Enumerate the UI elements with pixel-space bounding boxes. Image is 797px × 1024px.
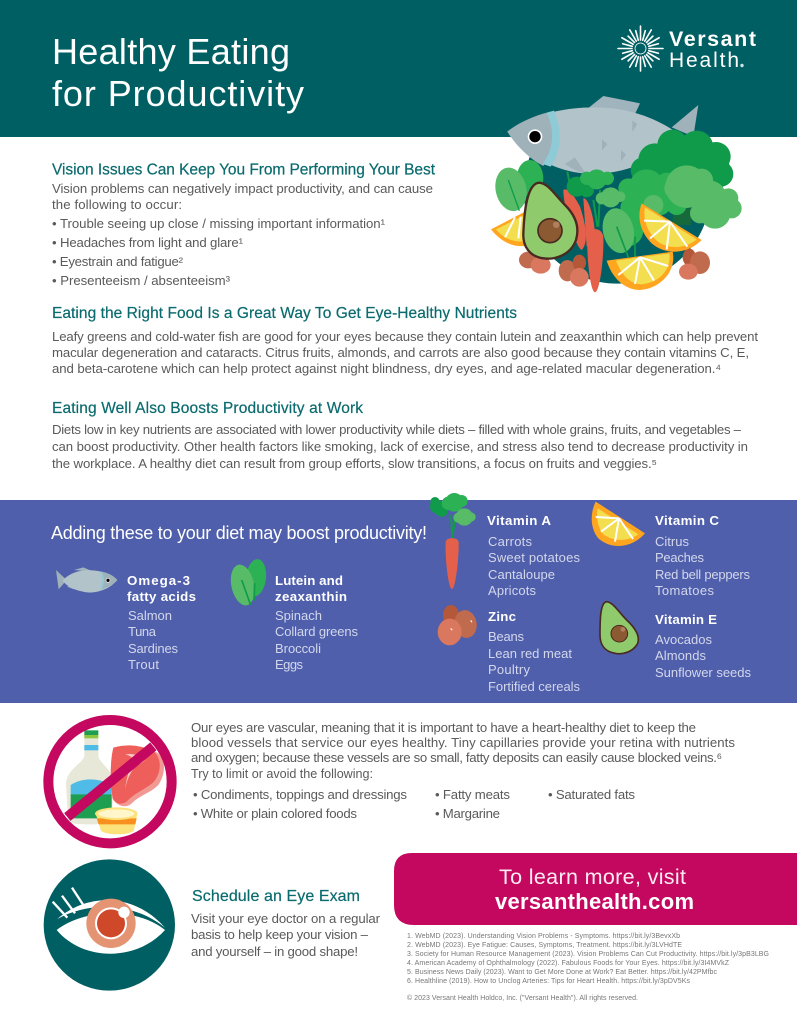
list: omega-3 foods: Sardines bbox=[128, 641, 178, 656]
section: vision issues bbox=[52, 162, 436, 288]
list: foods to limit: • Saturated fats bbox=[548, 787, 635, 802]
spinach leaves left bbox=[491, 160, 543, 214]
omega-3 group bbox=[56, 567, 196, 672]
fish bbox=[507, 96, 698, 174]
list: vitamin E foods: Sunflower seeds bbox=[655, 665, 752, 680]
text: right food body: Leafy greens and cold-water fish are good for your eyes because they contain lutein and zeaxanthin which can help prevent bbox=[52, 329, 758, 344]
text: eye exam body: Visit your eye doctor on a regular bbox=[191, 911, 381, 926]
heading: productivity at work: Eating Well Also Boosts Productivity at Work bbox=[52, 400, 363, 417]
zinc group bbox=[438, 605, 580, 694]
list: lutein foods: Eggs bbox=[275, 657, 304, 672]
list: lutein foods: Collard greens bbox=[275, 624, 358, 639]
icon: eye bbox=[44, 859, 175, 991]
list: vision symptoms: • Eyestrain and fatigue² bbox=[52, 254, 184, 269]
list: zinc foods: Lean red meat bbox=[488, 646, 572, 661]
references bbox=[407, 933, 769, 985]
text: vision intro: Vision problems can negatively impact productivity, and can cause bbox=[52, 181, 433, 196]
steak bbox=[111, 745, 164, 806]
list: vitamin C foods: Peaches bbox=[655, 550, 704, 565]
heading: eye exam: Schedule an Eye Exam bbox=[192, 888, 360, 905]
list: lutein foods: Spinach bbox=[275, 608, 322, 623]
right citrus wedge bbox=[639, 203, 702, 252]
section: productivity at work bbox=[52, 400, 748, 471]
list: vitamin C foods: Red bell peppers bbox=[655, 567, 750, 582]
text: productivity body: the workplace. A healthy diet can result from group efforts, slow transitions, a focus on fruits and veggies.⁵ bbox=[52, 456, 657, 471]
heading: lutein bbox=[275, 573, 347, 604]
icon: prohibited foods bbox=[48, 720, 172, 843]
list: lutein foods bbox=[275, 608, 358, 672]
references: 4. American Academy of Ophthalmology (2022). Fabulous Foods for Your Eyes. https://bit.ly/3I4MVkZ bbox=[407, 960, 730, 967]
list: zinc foods: Beans bbox=[488, 629, 524, 644]
logo: Versant Health bbox=[618, 26, 756, 72]
text: eye exam body bbox=[191, 911, 381, 959]
callout: learn more bbox=[394, 853, 797, 925]
text: vascular diet: Try to limit or avoid the following: bbox=[191, 767, 373, 781]
list: vitamin A foods: Apricots bbox=[488, 583, 536, 598]
heading: vision issues: Vision Issues Can Keep You From Performing Your Best bbox=[52, 162, 436, 178]
carrots with tops bbox=[563, 169, 625, 292]
icon: citrus wedge bbox=[592, 502, 645, 546]
callout: learn more: To learn more, visit bbox=[499, 865, 686, 889]
list: vitamin A foods: Cantaloupe bbox=[488, 567, 555, 582]
header band bbox=[0, 0, 797, 137]
list: lutein foods: Broccoli bbox=[275, 641, 321, 656]
text: vision intro: the following to occur: bbox=[52, 197, 182, 212]
heading: omega-3: Omega-3 bbox=[127, 573, 190, 588]
text: vascular diet: Our eyes are vascular, meaning that it is important to have a heart-healthy diet to keep the bbox=[191, 720, 696, 735]
list: foods to limit: • Fatty meats bbox=[435, 787, 510, 802]
text: vascular diet: and oxygen; because these vessels are so small, fatty deposits can easily cause blocked veins.⁶ bbox=[191, 750, 722, 765]
heading: vitamin C: Vitamin C bbox=[655, 513, 719, 528]
text: vascular diet bbox=[191, 720, 735, 781]
list: vitamin C foods bbox=[655, 534, 750, 598]
list: vitamin E foods bbox=[655, 632, 752, 680]
bottle bbox=[66, 730, 113, 824]
icon: avocado bbox=[600, 602, 638, 654]
vitamin E group bbox=[600, 602, 752, 680]
heading: vitamin E: Vitamin E bbox=[655, 612, 717, 627]
list: vitamin E foods: Avocados bbox=[655, 632, 712, 647]
list: vision symptoms: • Trouble seeing up close / missing important information¹ bbox=[52, 216, 386, 231]
panel heading: Adding these to your diet may boost productivity! bbox=[51, 523, 427, 543]
list: vision symptoms bbox=[52, 216, 386, 288]
icon: spinach bbox=[227, 558, 268, 608]
heading: vitamin A: Vitamin A bbox=[487, 513, 551, 528]
list: zinc foods: Poultry bbox=[488, 662, 530, 677]
vitamin C group bbox=[592, 502, 750, 598]
callout: learn more: versanthealth.com bbox=[495, 889, 694, 914]
list: omega-3 foods: Salmon bbox=[128, 608, 172, 623]
food illustration: fish, greens, citrus bbox=[491, 96, 742, 292]
text: right food body bbox=[52, 329, 758, 376]
list: vitamin A foods: Carrots bbox=[488, 534, 532, 549]
list: foods to limit bbox=[193, 787, 635, 821]
heading: lutein: Lutein and bbox=[275, 573, 343, 588]
list: vitamin C foods: Citrus bbox=[655, 534, 690, 549]
panel: nutrients bbox=[0, 493, 797, 703]
heading: omega-3 bbox=[127, 573, 196, 604]
heading: omega-3: fatty acids bbox=[127, 589, 196, 604]
references: 2. WebMD (2023). Eye Fatigue: Causes, Symptoms, Treatment. https://bit.ly/3LVHdTE bbox=[407, 942, 682, 949]
heading: lutein: zeaxanthin bbox=[275, 589, 347, 604]
text: eye exam body: and yourself – in good shape! bbox=[191, 944, 358, 959]
avocado bbox=[523, 183, 577, 259]
beans bbox=[519, 249, 710, 287]
list: omega-3 foods: Tuna bbox=[128, 624, 157, 639]
icon: fish bbox=[56, 567, 117, 593]
text: vision intro bbox=[52, 181, 433, 212]
logo: Versant Health: Health bbox=[669, 49, 739, 72]
text: right food body: and beta-carotene which can help protect against night blindness, dry eyes, and age-related macular degeneration.⁴ bbox=[52, 361, 721, 376]
title bbox=[52, 31, 304, 114]
list: vitamin A foods: Sweet potatoes bbox=[488, 550, 580, 565]
heading: right food: Eating the Right Food Is a Great Way To Get Eye-Healthy Nutrients bbox=[52, 305, 517, 322]
spinach leaf centre bbox=[599, 205, 638, 257]
bottom citrus wedge bbox=[607, 252, 673, 290]
list: omega-3 foods: Trout bbox=[128, 657, 159, 672]
section: right food bbox=[52, 305, 758, 376]
list: vision symptoms: • Headaches from light and glare¹ bbox=[52, 235, 244, 250]
references: 5. Business News Daily (2023). Want to Get More Done at Work? Eat Better. https://bit.ly/42PMfbc bbox=[407, 969, 718, 976]
heading: zinc: Zinc bbox=[488, 609, 516, 624]
left citrus wedge bbox=[491, 212, 525, 246]
list: foods to limit: • Condiments, toppings and dressings bbox=[193, 787, 407, 802]
text: productivity body bbox=[52, 422, 748, 471]
vitamin A group bbox=[430, 493, 580, 598]
list: omega-3 foods bbox=[128, 608, 178, 672]
references: 6. Healthline (2019). How to Unclog Arteries: Tips for Heart Health. https://bit.ly/3pDV5Ks bbox=[407, 978, 690, 985]
section: eye exam bbox=[191, 888, 381, 959]
list: vision symptoms: • Presenteeism / absenteeism³ bbox=[52, 273, 231, 288]
list: vitamin C foods: Tomatoes bbox=[655, 583, 714, 598]
copyright: © 2023 Versant Health Holdco, Inc. ("Versant Health"). All rights reserved. bbox=[407, 994, 638, 1002]
logo: Versant Health: Versant bbox=[669, 27, 756, 51]
list: zinc foods bbox=[488, 629, 580, 694]
title: Healthy Eating bbox=[52, 31, 290, 72]
icon: carrot bbox=[430, 493, 476, 589]
list: vitamin E foods: Almonds bbox=[655, 648, 706, 663]
dressing cup bbox=[95, 807, 138, 834]
list: foods to limit: • White or plain colored foods bbox=[193, 806, 357, 821]
text: vascular diet: blood vessels that service our eyes healthy. Tiny capillaries provide your retina with nutrients bbox=[191, 735, 735, 750]
icon: beans bbox=[438, 605, 479, 645]
text: productivity body: Diets low in key nutrients are associated with lower productivity while diets – filled with whole grains, fruits, and vegetables – bbox=[52, 422, 742, 437]
references: 1. WebMD (2023). Understanding Vision Problems - Symptoms. https://bit.ly/3BevxXb bbox=[407, 933, 680, 940]
title: for Productivity bbox=[52, 73, 304, 114]
list: foods to limit: • Margarine bbox=[435, 806, 500, 821]
prohibition ring bbox=[48, 720, 172, 843]
references: 3. Society for Human Resource Management (2023). Vision Problems Can Cut Productivity. https://bit.ly/3pB3LBG bbox=[407, 951, 769, 958]
list: zinc foods: Fortified cereals bbox=[488, 679, 580, 694]
lutein group bbox=[227, 558, 358, 672]
text: right food body: macular degeneration and cataracts. Citrus fruits, almonds, and carrots are also good because they contain vitamins C, E, bbox=[52, 345, 749, 360]
text: eye exam body: basis to help keep your vision – bbox=[191, 927, 369, 942]
broccoli bbox=[610, 130, 742, 247]
list: vitamin A foods bbox=[488, 534, 580, 598]
text: productivity body: can boost productivity. Other health factors like smoking, lack of exercise, and stress also tend to decrease productivity in bbox=[52, 439, 748, 454]
